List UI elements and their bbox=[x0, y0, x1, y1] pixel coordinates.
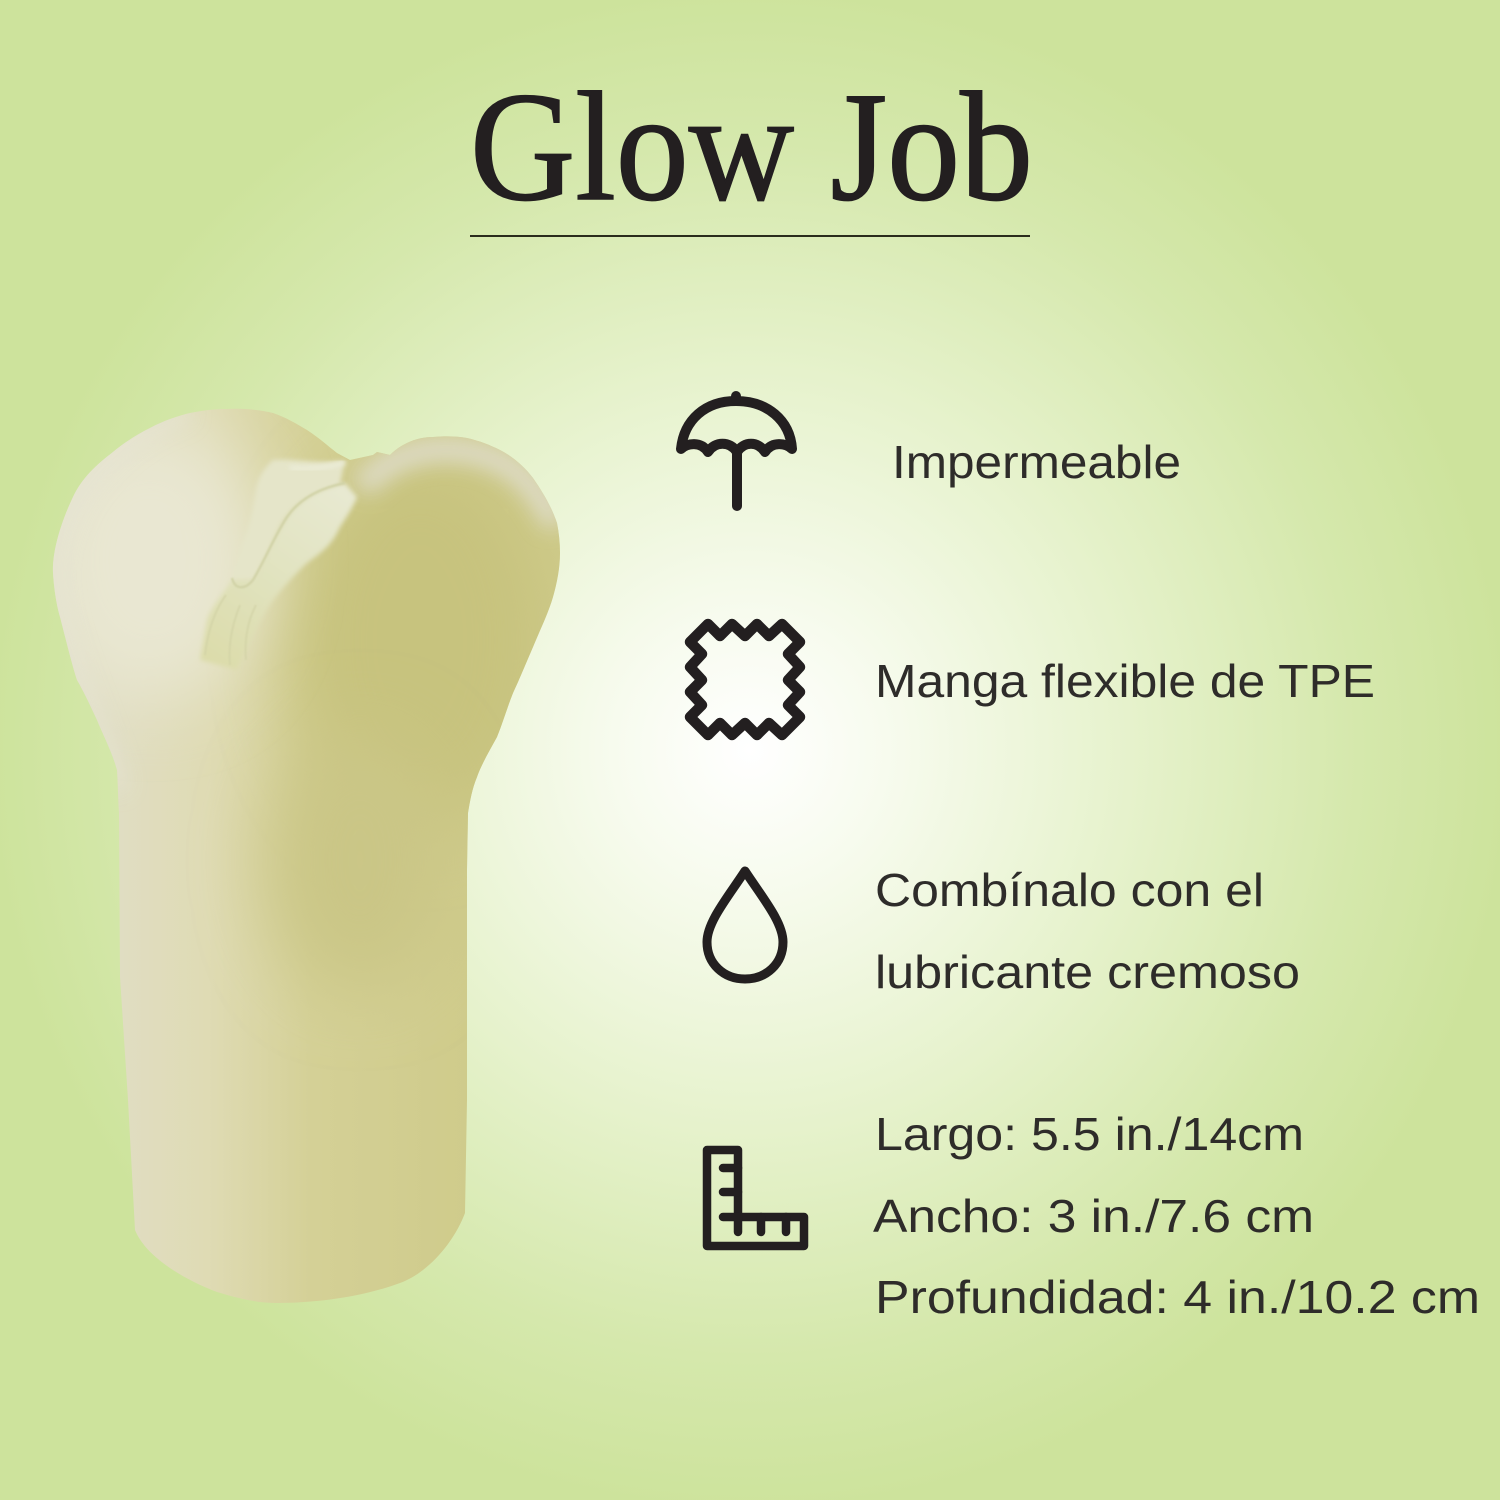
icon: water drop bbox=[707, 871, 783, 979]
label: dimensions text bbox=[873, 1108, 1480, 1323]
product image: flexible sleeve bbox=[35, 400, 580, 1320]
label: dimensions text: Largo: 5.5 in./14cm bbox=[875, 1108, 1304, 1160]
row: material bbox=[690, 624, 1375, 735]
label: lubricant text: Combínalo con el bbox=[875, 864, 1264, 916]
icon: fabric swatch bbox=[690, 624, 800, 735]
label: Manga flexible de TPE: Manga flexible de TPE bbox=[875, 655, 1375, 707]
row: lubricant bbox=[707, 864, 1300, 998]
label: Impermeable: Impermeable bbox=[892, 436, 1181, 488]
title underline bbox=[470, 235, 1030, 237]
label: lubricant text: lubricante cremoso bbox=[875, 946, 1300, 998]
row: dimensions bbox=[707, 1108, 1480, 1323]
label: lubricant text bbox=[875, 864, 1300, 998]
label: dimensions text: Profundidad: 4 in./10.2 cm bbox=[875, 1271, 1480, 1323]
icon: ruler bbox=[707, 1150, 804, 1246]
label: dimensions text: Ancho: 3 in./7.6 cm bbox=[873, 1190, 1314, 1242]
title: Glow Job bbox=[470, 60, 1033, 233]
row: waterproof bbox=[681, 396, 1181, 506]
icon: umbrella bbox=[681, 396, 792, 506]
